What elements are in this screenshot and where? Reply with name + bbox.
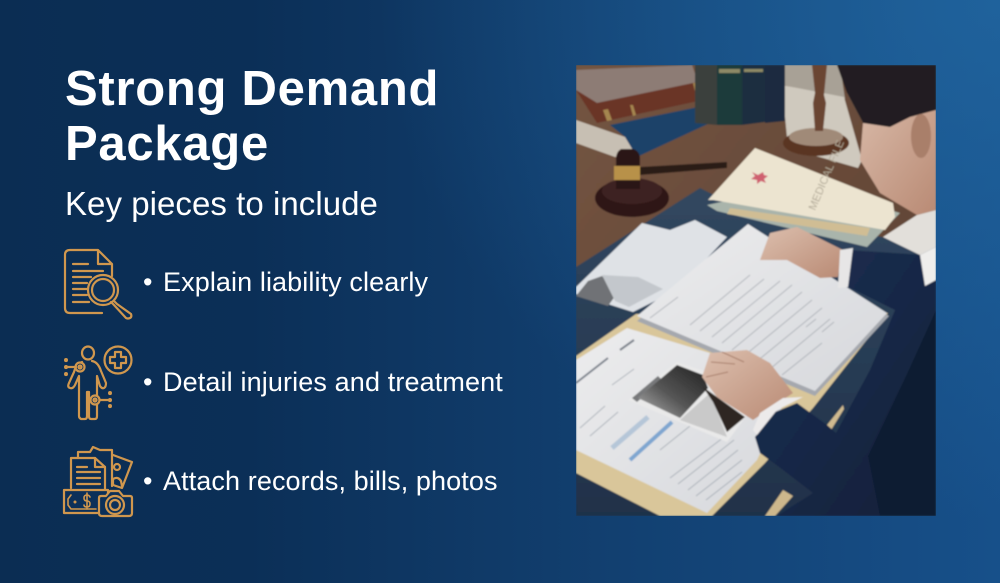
photo: attorney reviewing medical records at a desk xyxy=(576,65,936,516)
bullet: injuries: Detail injuries and treatment xyxy=(163,367,503,397)
lower document xyxy=(576,328,790,513)
upper left papers xyxy=(576,220,727,312)
photo: attorney reviewing medical records at a desk: MEDICAL FILE xyxy=(807,139,847,212)
hand on documents xyxy=(702,350,793,420)
main document xyxy=(637,314,890,396)
icon: records, bills and camera xyxy=(62,446,134,518)
title: Strong Demand xyxy=(65,62,439,116)
red cross xyxy=(751,172,768,184)
face xyxy=(860,108,936,216)
desk and wall xyxy=(576,65,918,268)
hair xyxy=(837,65,936,127)
subtitle: Key pieces to include xyxy=(65,185,378,222)
scale stand xyxy=(783,135,850,158)
bullet: injuries: • xyxy=(143,367,153,397)
jacket xyxy=(755,250,936,516)
bullet: liability: Explain liability clearly xyxy=(163,267,428,297)
medical file xyxy=(707,200,900,247)
hand holding paper xyxy=(760,227,843,278)
navy desk mat xyxy=(576,188,936,516)
bullet: attachments: Attach records, bills, photos xyxy=(163,466,498,496)
tan folder xyxy=(576,313,888,516)
gavel xyxy=(594,185,670,218)
x-ray photos xyxy=(630,389,745,441)
books xyxy=(576,65,698,103)
icon: injured person with medical cross xyxy=(64,345,133,420)
title xyxy=(65,62,439,170)
title: Package xyxy=(65,116,269,170)
shirt cuffs and collar xyxy=(838,248,853,288)
bullet: liability: • xyxy=(143,267,153,297)
bullet: attachments: • xyxy=(143,466,153,496)
icon: document with magnifying glass xyxy=(64,248,132,320)
